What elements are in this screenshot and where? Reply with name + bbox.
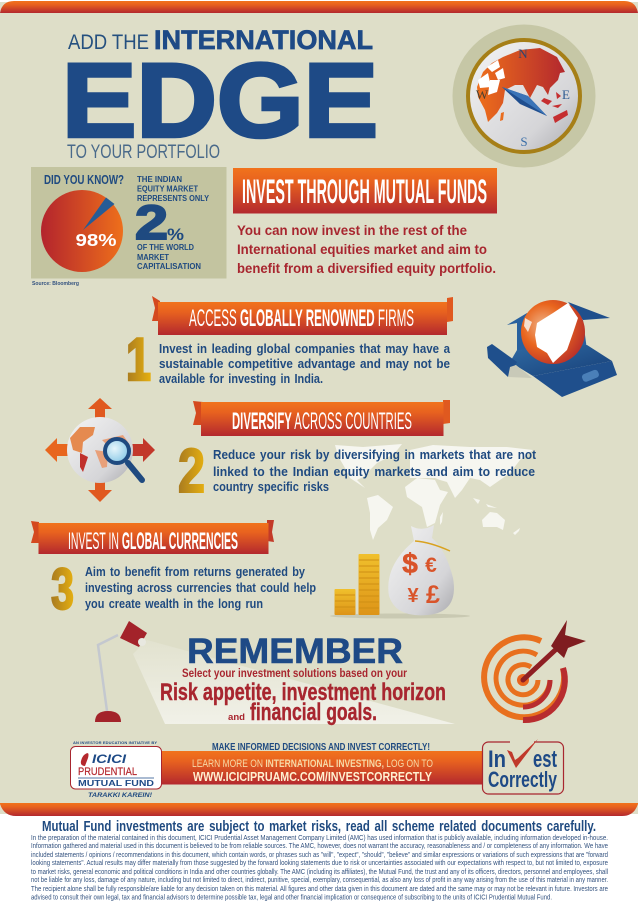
panel: did you know: % [167,225,184,244]
source note: Source: Bloomberg [32,281,79,287]
remember goals: Risk appetite, investment horizon [160,679,446,706]
icon: compass: S [520,134,528,149]
step 3 text [85,565,316,611]
globe continents [535,303,578,363]
panel: did you know: DID YOU KNOW? [44,173,124,187]
step 3 text: you create wealth in the long run [85,597,263,611]
remember goals: financial goals. [250,699,377,726]
number 1: 1 [126,326,151,393]
call to action banner: WWW.ICICIPRUAMC.COM/INVESTCORRECTLY [193,770,433,784]
panel: did you know [31,167,226,278]
step 2 text: country specific risks [213,480,329,494]
step 3 text: investing across currencies that could help [85,581,316,595]
banner 2 [193,400,450,436]
remember goals: and [228,712,245,722]
intro text: International equities market and aim to [237,242,487,257]
logo: icici prudential: TARAKKI KAREIN! [88,792,153,799]
logo: icici prudential: PRUDENTIAL [78,766,137,778]
number 3: 3 [51,557,74,622]
icon: globe in open box [487,300,617,397]
number 2: 2 [178,437,205,506]
banner 2: DIVERSIFY ACROSS COUNTRIES [232,408,412,435]
compass world map [477,48,565,122]
icon: compass: W [476,87,489,102]
bottom bar [0,803,638,816]
pie chart: 98% [76,230,117,250]
panel: did you know: THE INDIAN [137,175,182,184]
step 1 text: Invest in leading global companies that may have a [159,342,451,356]
icon: globe with magnifier and arrows [45,398,155,502]
panel: did you know: MARKET [137,253,169,262]
banner 1: ACCESS GLOBALLY RENOWNED FIRMS [189,305,414,332]
logo: icici prudential [70,746,162,799]
panel: did you know: EQUITY MARKET [137,184,198,194]
icon: compass: N [518,46,528,61]
panel: did you know: CAPITALISATION [137,262,201,271]
pie chart [41,190,123,272]
logo: icici prudential: ICICI [92,752,127,766]
icon: money bag [388,525,454,615]
logo: invest correctly: Correctly [488,767,558,792]
logo: invest correctly: In [488,746,506,773]
icon: lamp [95,621,455,724]
remember subheading: Select your investment solutions based on your [182,666,407,680]
panel: did you know: REPRESENTS ONLY [137,194,210,203]
step 2 text: linked to the Indian equity markets and aim to reduce [213,465,535,479]
title: INTERNATIONAL [154,25,373,55]
logo: icici prudential: MUTUAL FUND [78,779,154,788]
title: ADD THE [68,31,149,54]
icon: money bag: € [425,554,437,577]
banner 1 [152,296,453,335]
logo label: AN INVESTOR EDUCATION INITIATIVE BY [73,740,157,745]
step 3 text: Aim to benefit from returns generated by [85,565,305,579]
intro text: You can now invest in the rest of the [237,223,467,238]
banner 3 [31,520,274,555]
icon: money bag: £ [426,581,440,609]
intro text [237,223,496,276]
step 1 text: sustainable competitive advantage and may not be [159,357,450,371]
banner 3: INVEST IN GLOBAL CURRENCIES [68,528,238,555]
icon: compass: E [562,87,570,102]
title: TO YOUR PORTFOLIO [67,141,220,163]
compass needle [502,87,547,116]
step 2 text: Reduce your risk by diversifying in markets that are not [213,448,537,462]
top bar [0,1,638,13]
step 1 text [159,342,451,386]
compass white patches [478,60,505,95]
heading banner: invest through mutual funds [233,168,497,214]
remember goals [160,679,446,726]
icon: money bag: ¥ [407,585,419,607]
remember heading: REMEMBER [187,632,403,671]
icon: coin stacks [330,554,470,618]
panel: did you know: OF THE WORLD [137,243,194,252]
panel: did you know: 2 [135,197,168,250]
step 1 text: available for investing in India. [159,372,323,386]
step 2 text [213,448,537,494]
icon: target with arrow [484,620,586,720]
globe continents [70,427,95,453]
logo: invest correctly [482,738,564,794]
call to action banner: LEARN MORE ON INTERNATIONAL INVESTING, LOG ON TO [192,758,433,770]
intro text: benefit from a diversified equity portfolio. [237,261,496,276]
call to action heading: MAKE INFORMED DECISIONS AND INVEST CORRECTLY! [212,742,430,753]
title: EDGE [62,42,378,160]
logo: invest correctly: est [533,746,557,773]
icon: money bag: $ [402,548,418,579]
icon: compass [452,24,596,168]
white world map [335,444,533,540]
call to action banner [160,751,482,784]
disclaimer text [31,833,608,902]
